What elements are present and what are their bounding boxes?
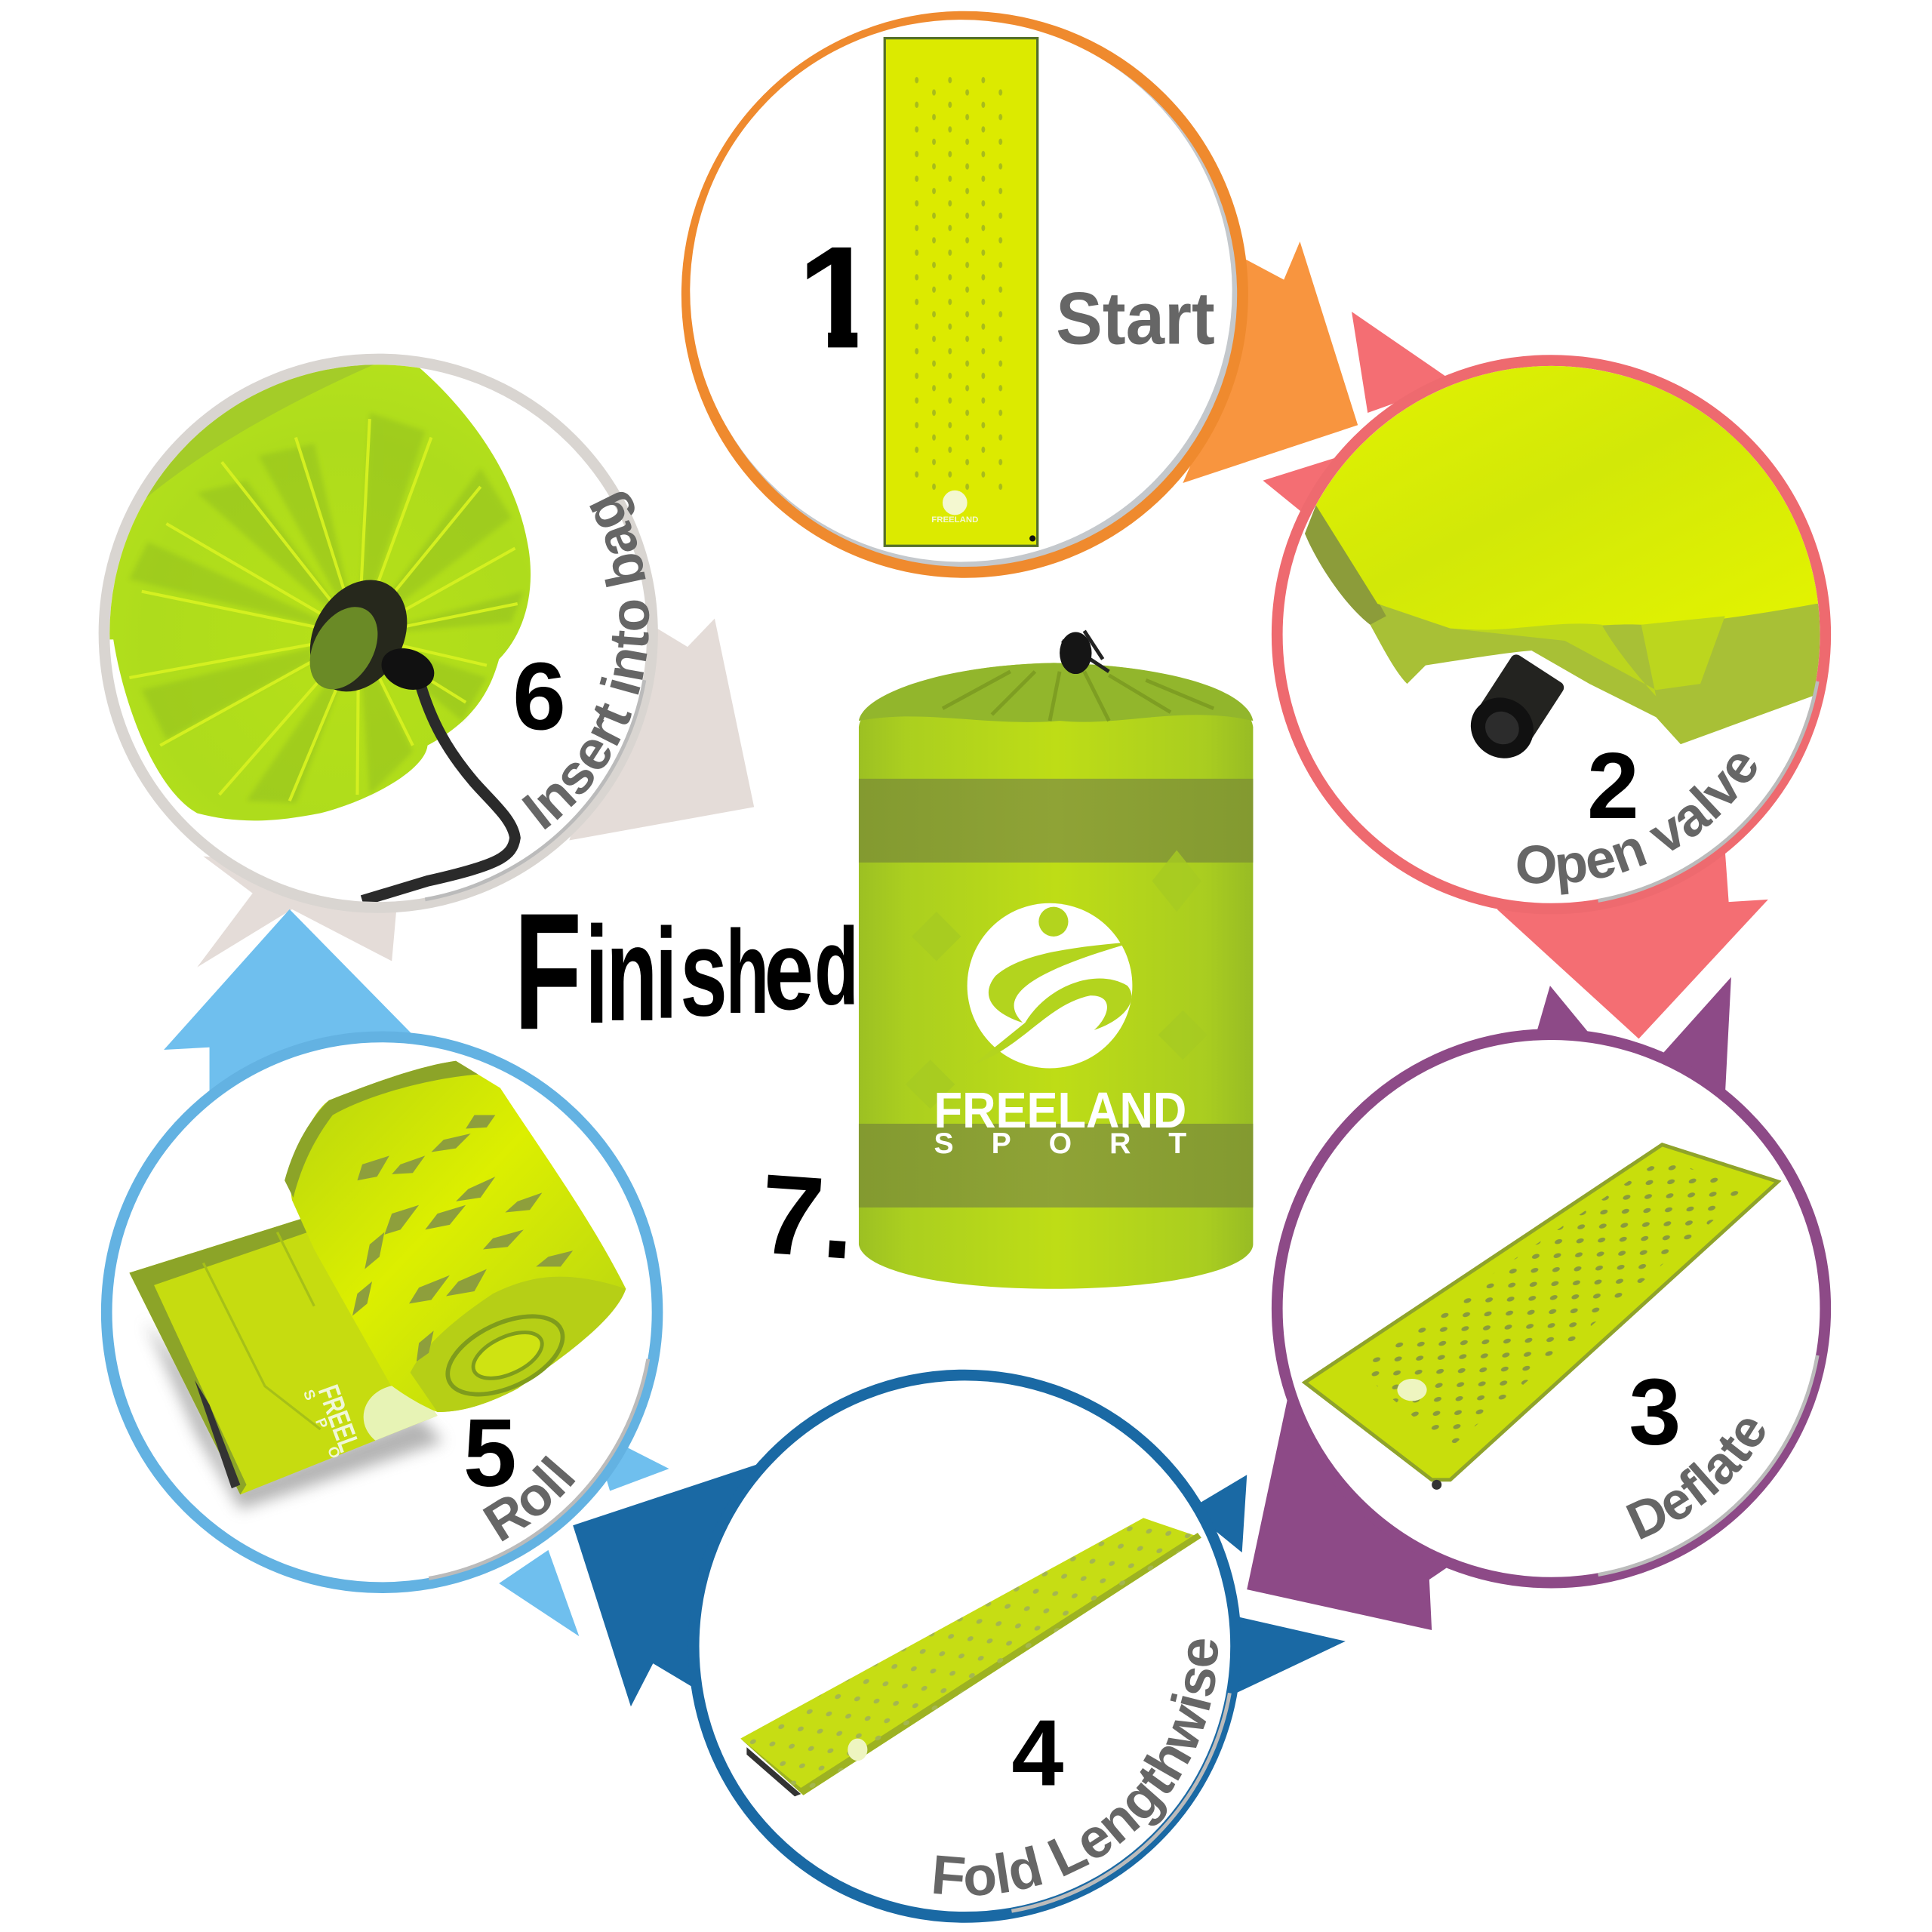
arrow: deflate to fold (purple) (1247, 977, 1731, 1630)
number 2: 2 (1587, 734, 1639, 838)
heading: finished: h (726, 906, 769, 1038)
number 6: 6 (512, 643, 566, 750)
heading: finished: n (606, 898, 657, 1049)
bag faint diamonds (906, 851, 1208, 1109)
photo: flat mat (884, 38, 1038, 546)
label: step 7: 7. (756, 1150, 860, 1283)
arrow: insert into bag to finished (grey) (197, 619, 754, 968)
label: open valve: Open valve (1517, 754, 1757, 895)
arrow: start to open valve (orange) (1183, 242, 1358, 483)
number 5: 5 (463, 1399, 517, 1506)
photo: rolled mat (129, 1061, 626, 1509)
number 1: 1 (797, 216, 878, 378)
heading: finished: s (680, 903, 728, 1041)
panel: step 2 open valve (1247, 355, 1831, 939)
heading: finished: d (814, 906, 859, 1028)
number 4: 4 (1011, 1702, 1063, 1806)
bag body (859, 663, 1253, 1289)
brand name: FREELAND (934, 1082, 1186, 1139)
heading: finished: i (656, 902, 677, 1045)
heading: finished: i (586, 898, 608, 1052)
number 3: 3 (1629, 1360, 1681, 1464)
panel: step 5 roll (101, 1031, 663, 1593)
bag upper band (859, 779, 1253, 863)
photo: flat mat: FREELAND (931, 515, 978, 525)
arrow: fold to roll (dark blue) (573, 1460, 1346, 1706)
photo: rolled mat: SPO (300, 1387, 352, 1481)
logo: freeland sport (968, 903, 1136, 1069)
bag toggle (1060, 631, 1109, 674)
label: fold lengthwise: Fold Lengthwise (934, 1639, 1218, 1896)
photo: deflated mat (1305, 1145, 1778, 1490)
panel: step 6 insert into bag (98, 315, 691, 913)
brand sub-name: SPORT (934, 1128, 1186, 1160)
photo: rolled mat: FREEL (312, 1381, 366, 1456)
panel: step 1 start (687, 17, 1243, 572)
label: roll: Roll (483, 1455, 575, 1541)
photo: folded mat (740, 1518, 1201, 1796)
bag top gathered fabric (859, 663, 1253, 722)
arrow: roll to insert (light blue) (164, 909, 669, 1636)
heading: finished: F (514, 878, 582, 1064)
label: deflate: Deflate (1626, 1419, 1764, 1540)
panel: step 4 fold lengthwise (691, 1369, 1240, 1923)
bag lower band (859, 1124, 1253, 1208)
photo: mat valve (1305, 365, 1820, 758)
arrow: open valve to deflate (pink) (1263, 312, 1768, 1038)
heading: finished (514, 878, 859, 1064)
label: start: Start (1056, 277, 1215, 360)
illustration: finished bag (859, 631, 1253, 1289)
label: insert into bag: Insert into bag (521, 492, 649, 830)
heading: finished: e (764, 906, 814, 1033)
photo: stuff sack (109, 365, 531, 903)
panel: step 3 deflate (1247, 1004, 1831, 1588)
